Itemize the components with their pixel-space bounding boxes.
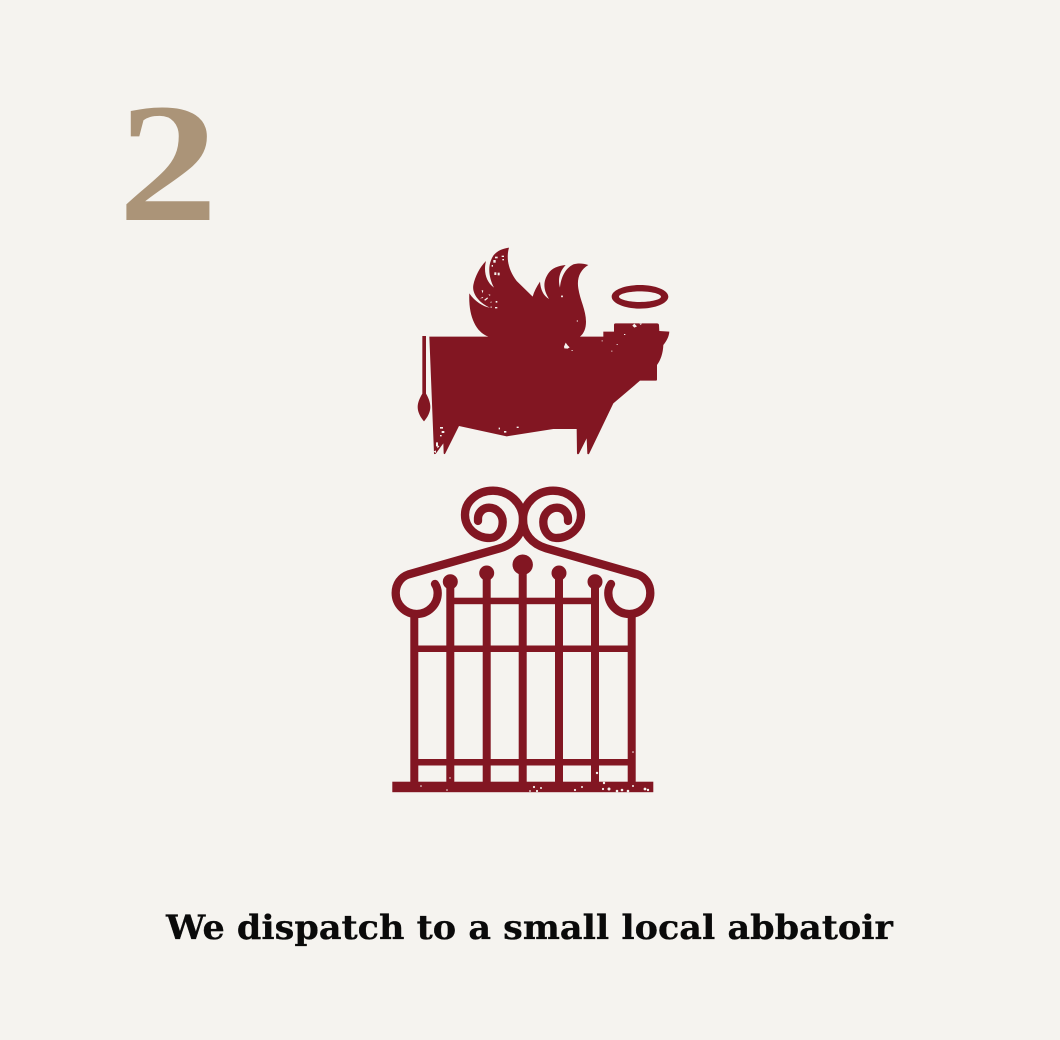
- gate finials: [443, 554, 602, 589]
- step number: 2: [118, 69, 218, 257]
- distressed specks on gate base: [420, 751, 649, 792]
- halo: [612, 285, 668, 309]
- gate base: [392, 782, 653, 792]
- caption: We dispatch to a small local abbatoir: [165, 908, 894, 948]
- distressed specks on pig: [433, 256, 642, 453]
- pig body and wings: [429, 248, 669, 454]
- icon: iron gate: [392, 491, 653, 792]
- gate scrollwork left: [396, 491, 523, 614]
- gate scrollwork right: [523, 491, 650, 614]
- gate bars: [410, 565, 636, 783]
- icon: flying pig with wings and halo: [418, 248, 669, 454]
- pig tail: [418, 336, 430, 421]
